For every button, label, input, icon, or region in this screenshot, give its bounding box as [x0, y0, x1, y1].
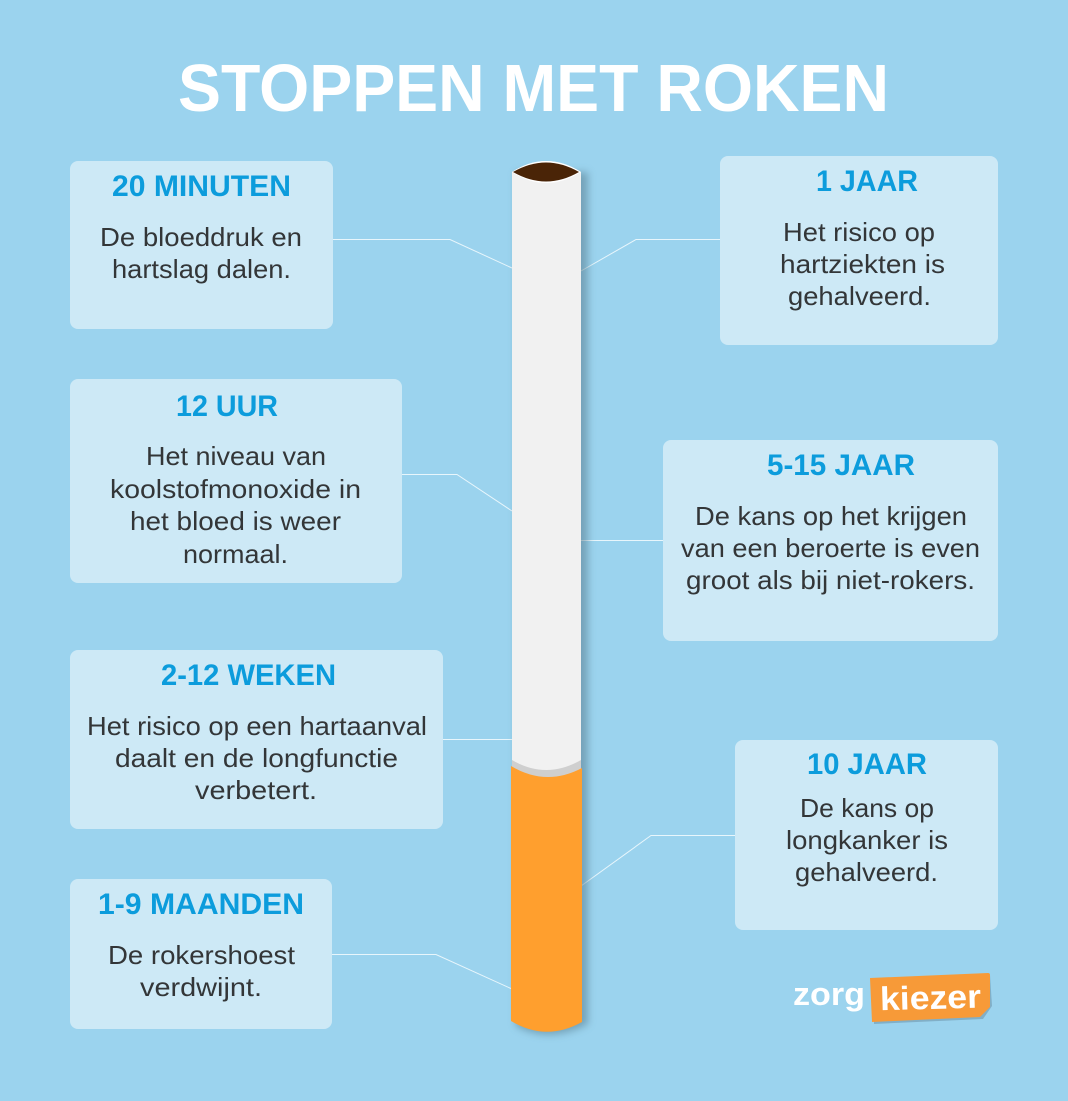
panel: 1-9 maanden: verdwijnt.	[140, 972, 262, 1002]
panel: 12 uur: koolstofmonoxide in	[110, 474, 361, 504]
panel: 1 jaar: 1 JAAR	[816, 165, 918, 198]
panel: 1-9 maanden: 1-9 MAANDEN	[98, 888, 304, 921]
panel: 20 minuten: De bloeddruk en	[100, 222, 302, 252]
logo word: zorg: zorg	[793, 976, 865, 1012]
panel: 1-9 maanden	[70, 879, 332, 1029]
panel: 1 jaar: hartziekten is	[780, 249, 945, 279]
panel: 12 uur: normaal.	[183, 539, 288, 569]
logo badge shadow	[874, 975, 992, 1024]
panel: 2-12 weken: Het risico op een hartaanval	[87, 711, 427, 741]
panel: 20 minuten: hartslag dalen.	[112, 254, 291, 284]
filter band	[512, 760, 581, 780]
cigarette filter	[511, 766, 582, 1032]
panel: 10 jaar: De kans op	[800, 793, 934, 823]
panel: 2-12 weken: verbetert.	[195, 775, 317, 805]
cigarette	[511, 161, 588, 1035]
panel: 5-15 jaar	[663, 440, 998, 641]
panel: 5-15 jaar: van een beroerte is even	[681, 533, 980, 563]
panel: 10 jaar	[735, 740, 998, 930]
panel: 1 jaar: Het risico op	[783, 217, 935, 247]
logo word: kiezer: kiezer	[879, 978, 982, 1017]
panel: 2-12 weken	[70, 650, 443, 829]
panel: 1-9 maanden: De rokershoest	[108, 940, 296, 970]
panel: 5-15 jaar: groot als bij niet-rokers.	[686, 565, 975, 595]
cigarette shadow	[516, 172, 588, 1035]
panel: 12 uur: het bloed is weer	[130, 506, 341, 536]
cigarette burnt end	[513, 162, 579, 182]
panel: 1 jaar	[720, 156, 998, 345]
panel: 12 uur: 12 UUR	[176, 390, 278, 423]
cigarette paper	[512, 161, 581, 775]
panel: 5-15 jaar: De kans op het krijgen	[695, 501, 967, 531]
panel: 12 uur	[70, 379, 402, 583]
title: STOPPEN MET ROKEN	[178, 51, 889, 126]
logo: zorgkiezer	[793, 973, 992, 1024]
panel: 2-12 weken: 2-12 WEKEN	[161, 659, 336, 692]
panel: 5-15 jaar: 5-15 JAAR	[767, 449, 915, 482]
panel: 10 jaar: gehalveerd.	[795, 857, 938, 887]
panel: 2-12 weken: daalt en de longfunctie	[115, 743, 398, 773]
panel: 20 minuten	[70, 161, 333, 329]
panel: 20 minuten: 20 MINUTEN	[112, 170, 291, 203]
connector lines	[331, 240, 735, 989]
panel: 1 jaar: gehalveerd.	[788, 281, 931, 311]
logo badge	[870, 973, 990, 1022]
panel: 10 jaar: longkanker is	[786, 825, 948, 855]
panel: 12 uur: Het niveau van	[146, 441, 326, 471]
cigarette tip rim	[512, 161, 581, 183]
panel: 10 jaar: 10 JAAR	[807, 748, 927, 781]
